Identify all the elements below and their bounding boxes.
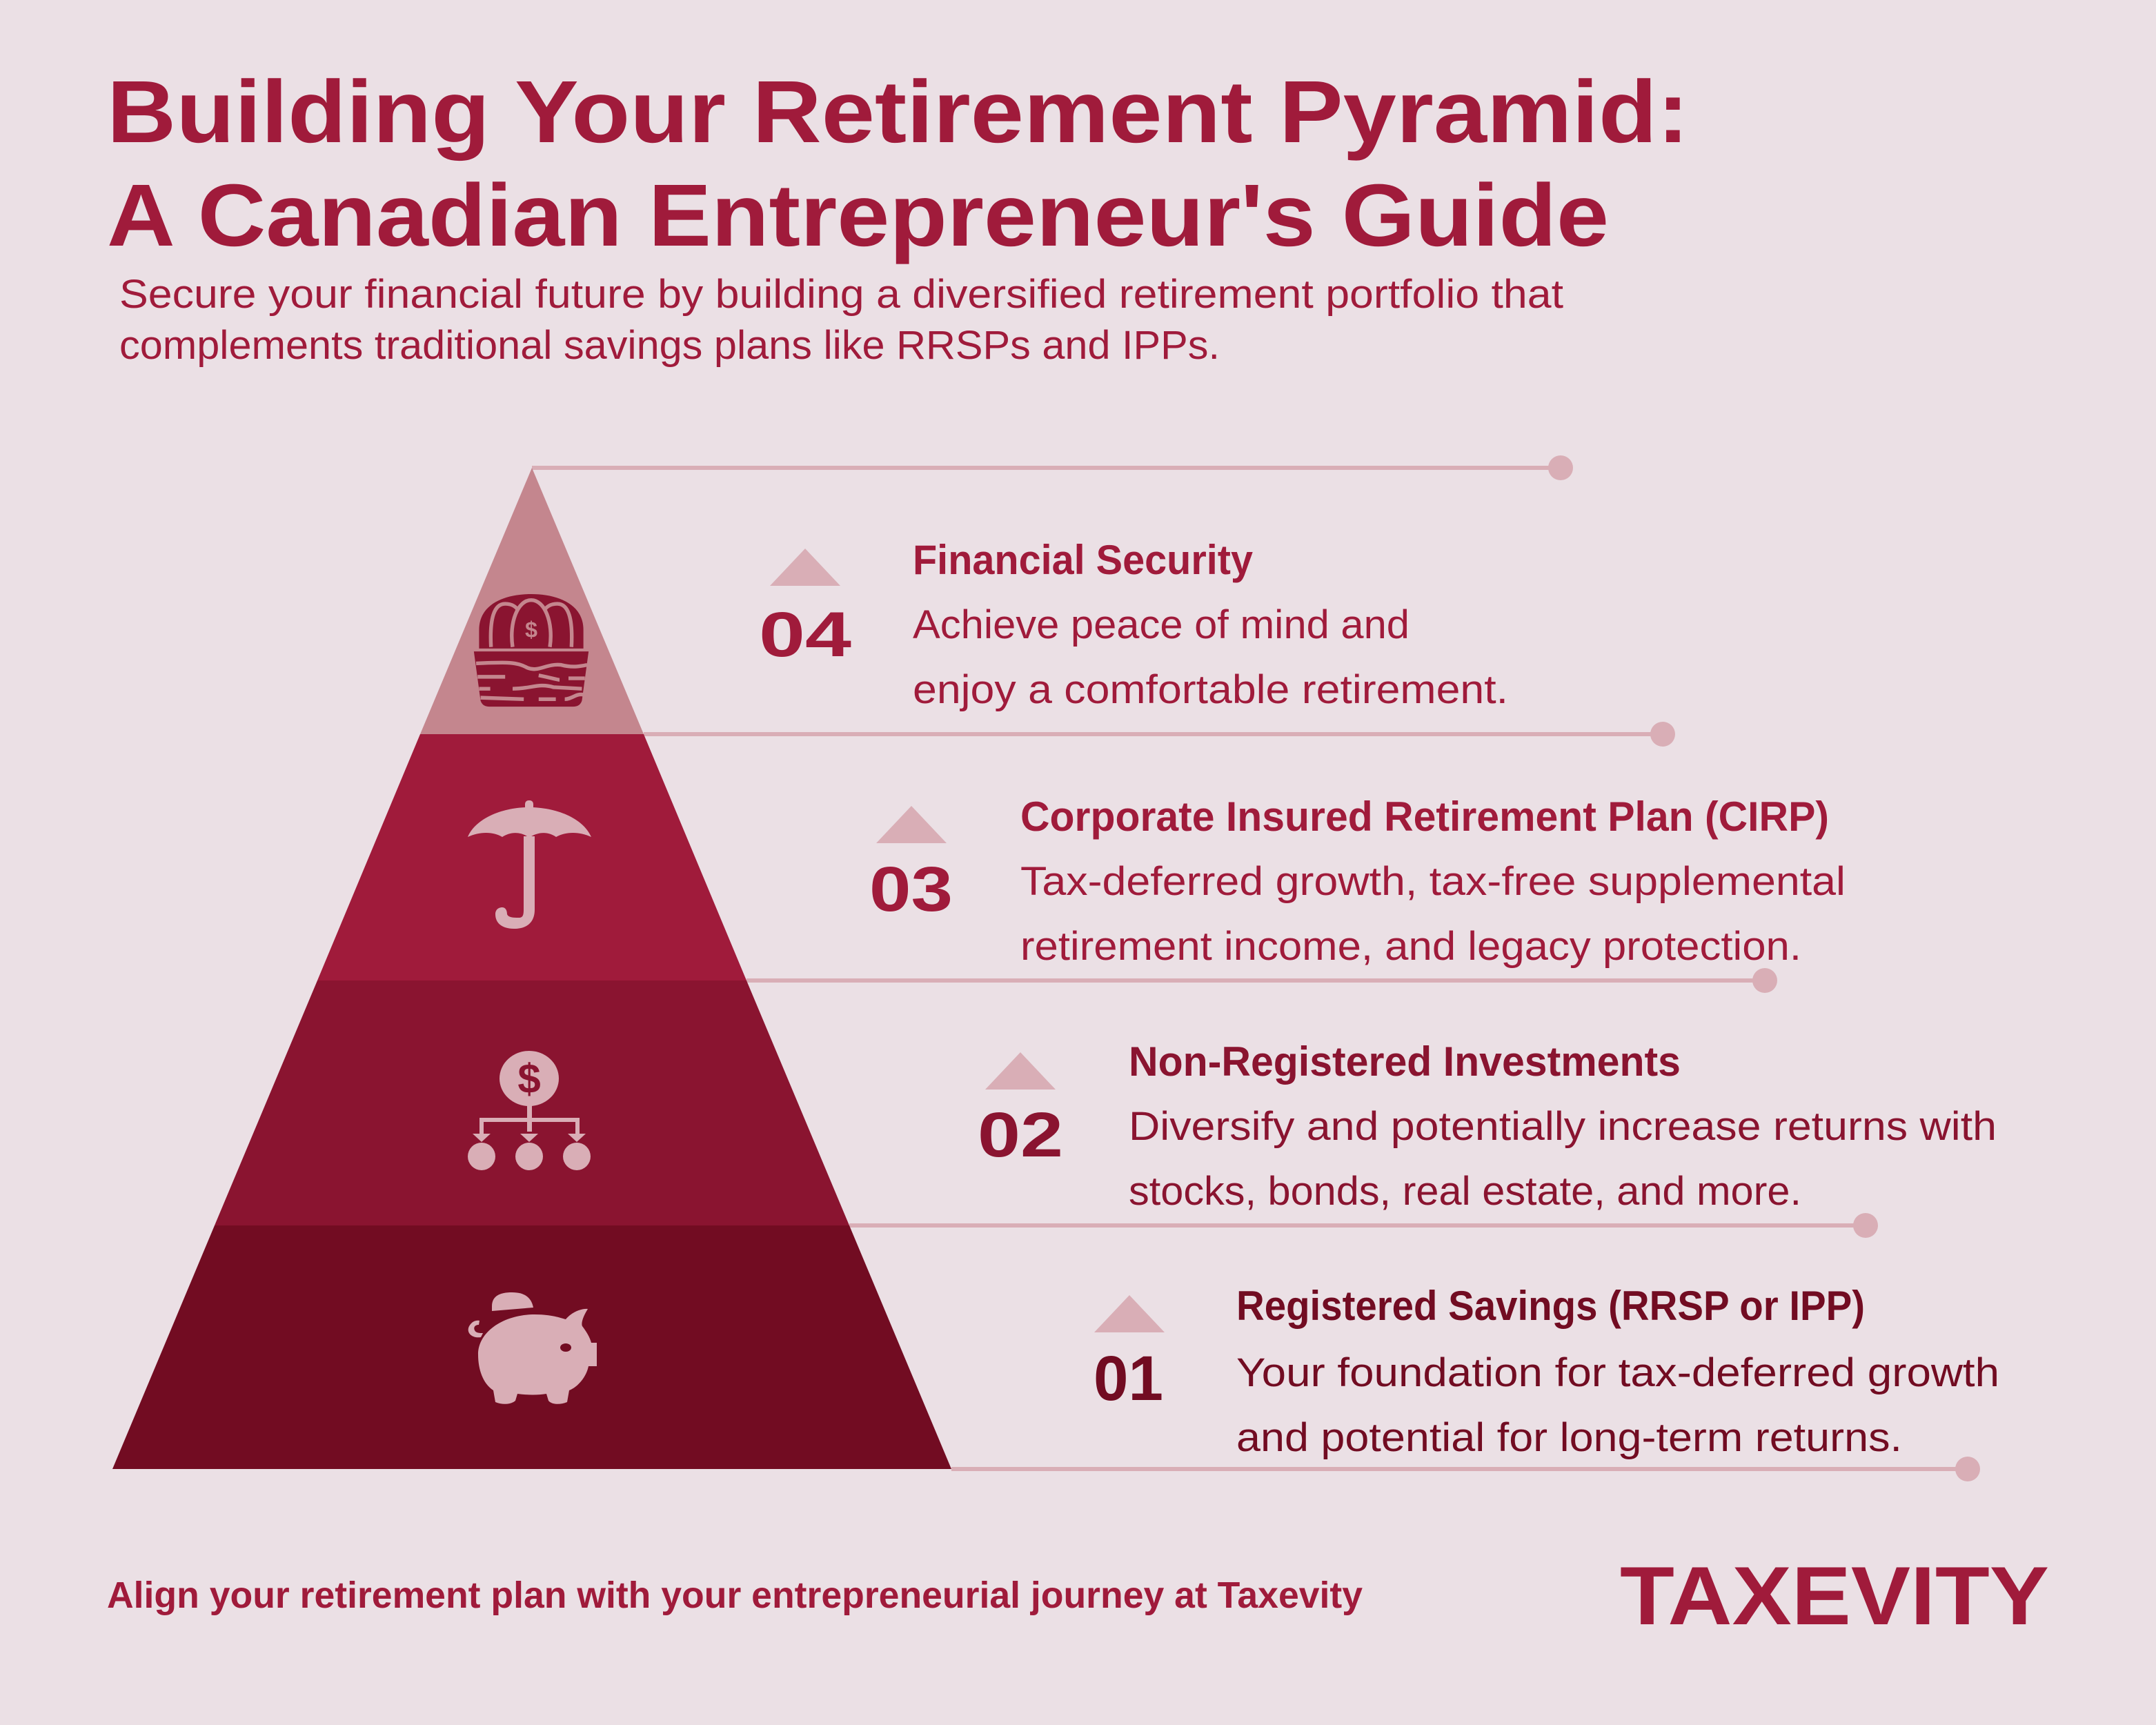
icon: piggy bank — [468, 1292, 597, 1404]
tier 2 — [215, 980, 849, 1225]
tier 1 text: Your foundation for tax-deferred growth — [1236, 1350, 1999, 1395]
subtitle — [119, 272, 1563, 368]
tier 1 text: and potential for long-term returns. — [1236, 1415, 1902, 1460]
icon: nest egg basket: $ — [525, 618, 537, 642]
tier 1 — [112, 1225, 951, 1469]
tier 4 text: Achieve peace of mind and — [913, 602, 1410, 647]
tier 3 text: Corporate Insured Retirement Plan (CIRP) — [1020, 793, 1829, 840]
tier 3 text — [869, 793, 1846, 969]
tier 3 text: retirement income, and legacy protection. — [1020, 924, 1801, 969]
title — [107, 63, 1689, 265]
logo: TAXEVITY — [1620, 1550, 2049, 1642]
tier 4 text: 04 — [759, 600, 851, 670]
icon: nest egg basket — [474, 594, 589, 707]
title: A Canadian Entrepreneur's Guide — [107, 166, 1609, 265]
tier 1 text: 01 — [1094, 1343, 1163, 1414]
tier 2 text: stocks, bonds, real estate, and more. — [1129, 1169, 1801, 1214]
title: Building Your Retirement Pyramid: — [107, 63, 1689, 161]
icon: umbrella — [468, 800, 591, 929]
tier 4 text: Financial Security — [913, 537, 1254, 583]
tier 3 text: Tax-deferred growth, tax-free supplemental — [1020, 859, 1846, 904]
tier 1 text: Registered Savings (RRSP or IPP) — [1236, 1283, 1865, 1329]
tier 3 — [317, 734, 746, 980]
icon: money tree: $ — [517, 1056, 541, 1102]
subtitle: complements traditional savings plans like RRSPs and IPPs. — [119, 323, 1220, 368]
tier 4 — [420, 468, 644, 734]
footer call to action: Align your retirement plan with your entrepreneurial journey at Taxevity — [107, 1575, 1363, 1616]
icon: money tree — [468, 1051, 591, 1170]
tier 2 text: 02 — [978, 1100, 1063, 1170]
connector lines — [532, 455, 1980, 1481]
tier 4 text — [759, 537, 1508, 712]
tier 2 text: Diversify and potentially increase returns with — [1129, 1104, 1997, 1149]
tier 1 text — [1094, 1283, 1999, 1460]
tier 4 text: enjoy a comfortable retirement. — [913, 667, 1508, 712]
tier 2 text — [978, 1038, 1997, 1214]
tier 2 text: Non-Registered Investments — [1129, 1038, 1681, 1085]
tier 3 text: 03 — [869, 854, 953, 925]
subtitle: Secure your financial future by building a diversified retirement portfolio that — [119, 272, 1563, 317]
pyramid — [112, 468, 951, 1469]
